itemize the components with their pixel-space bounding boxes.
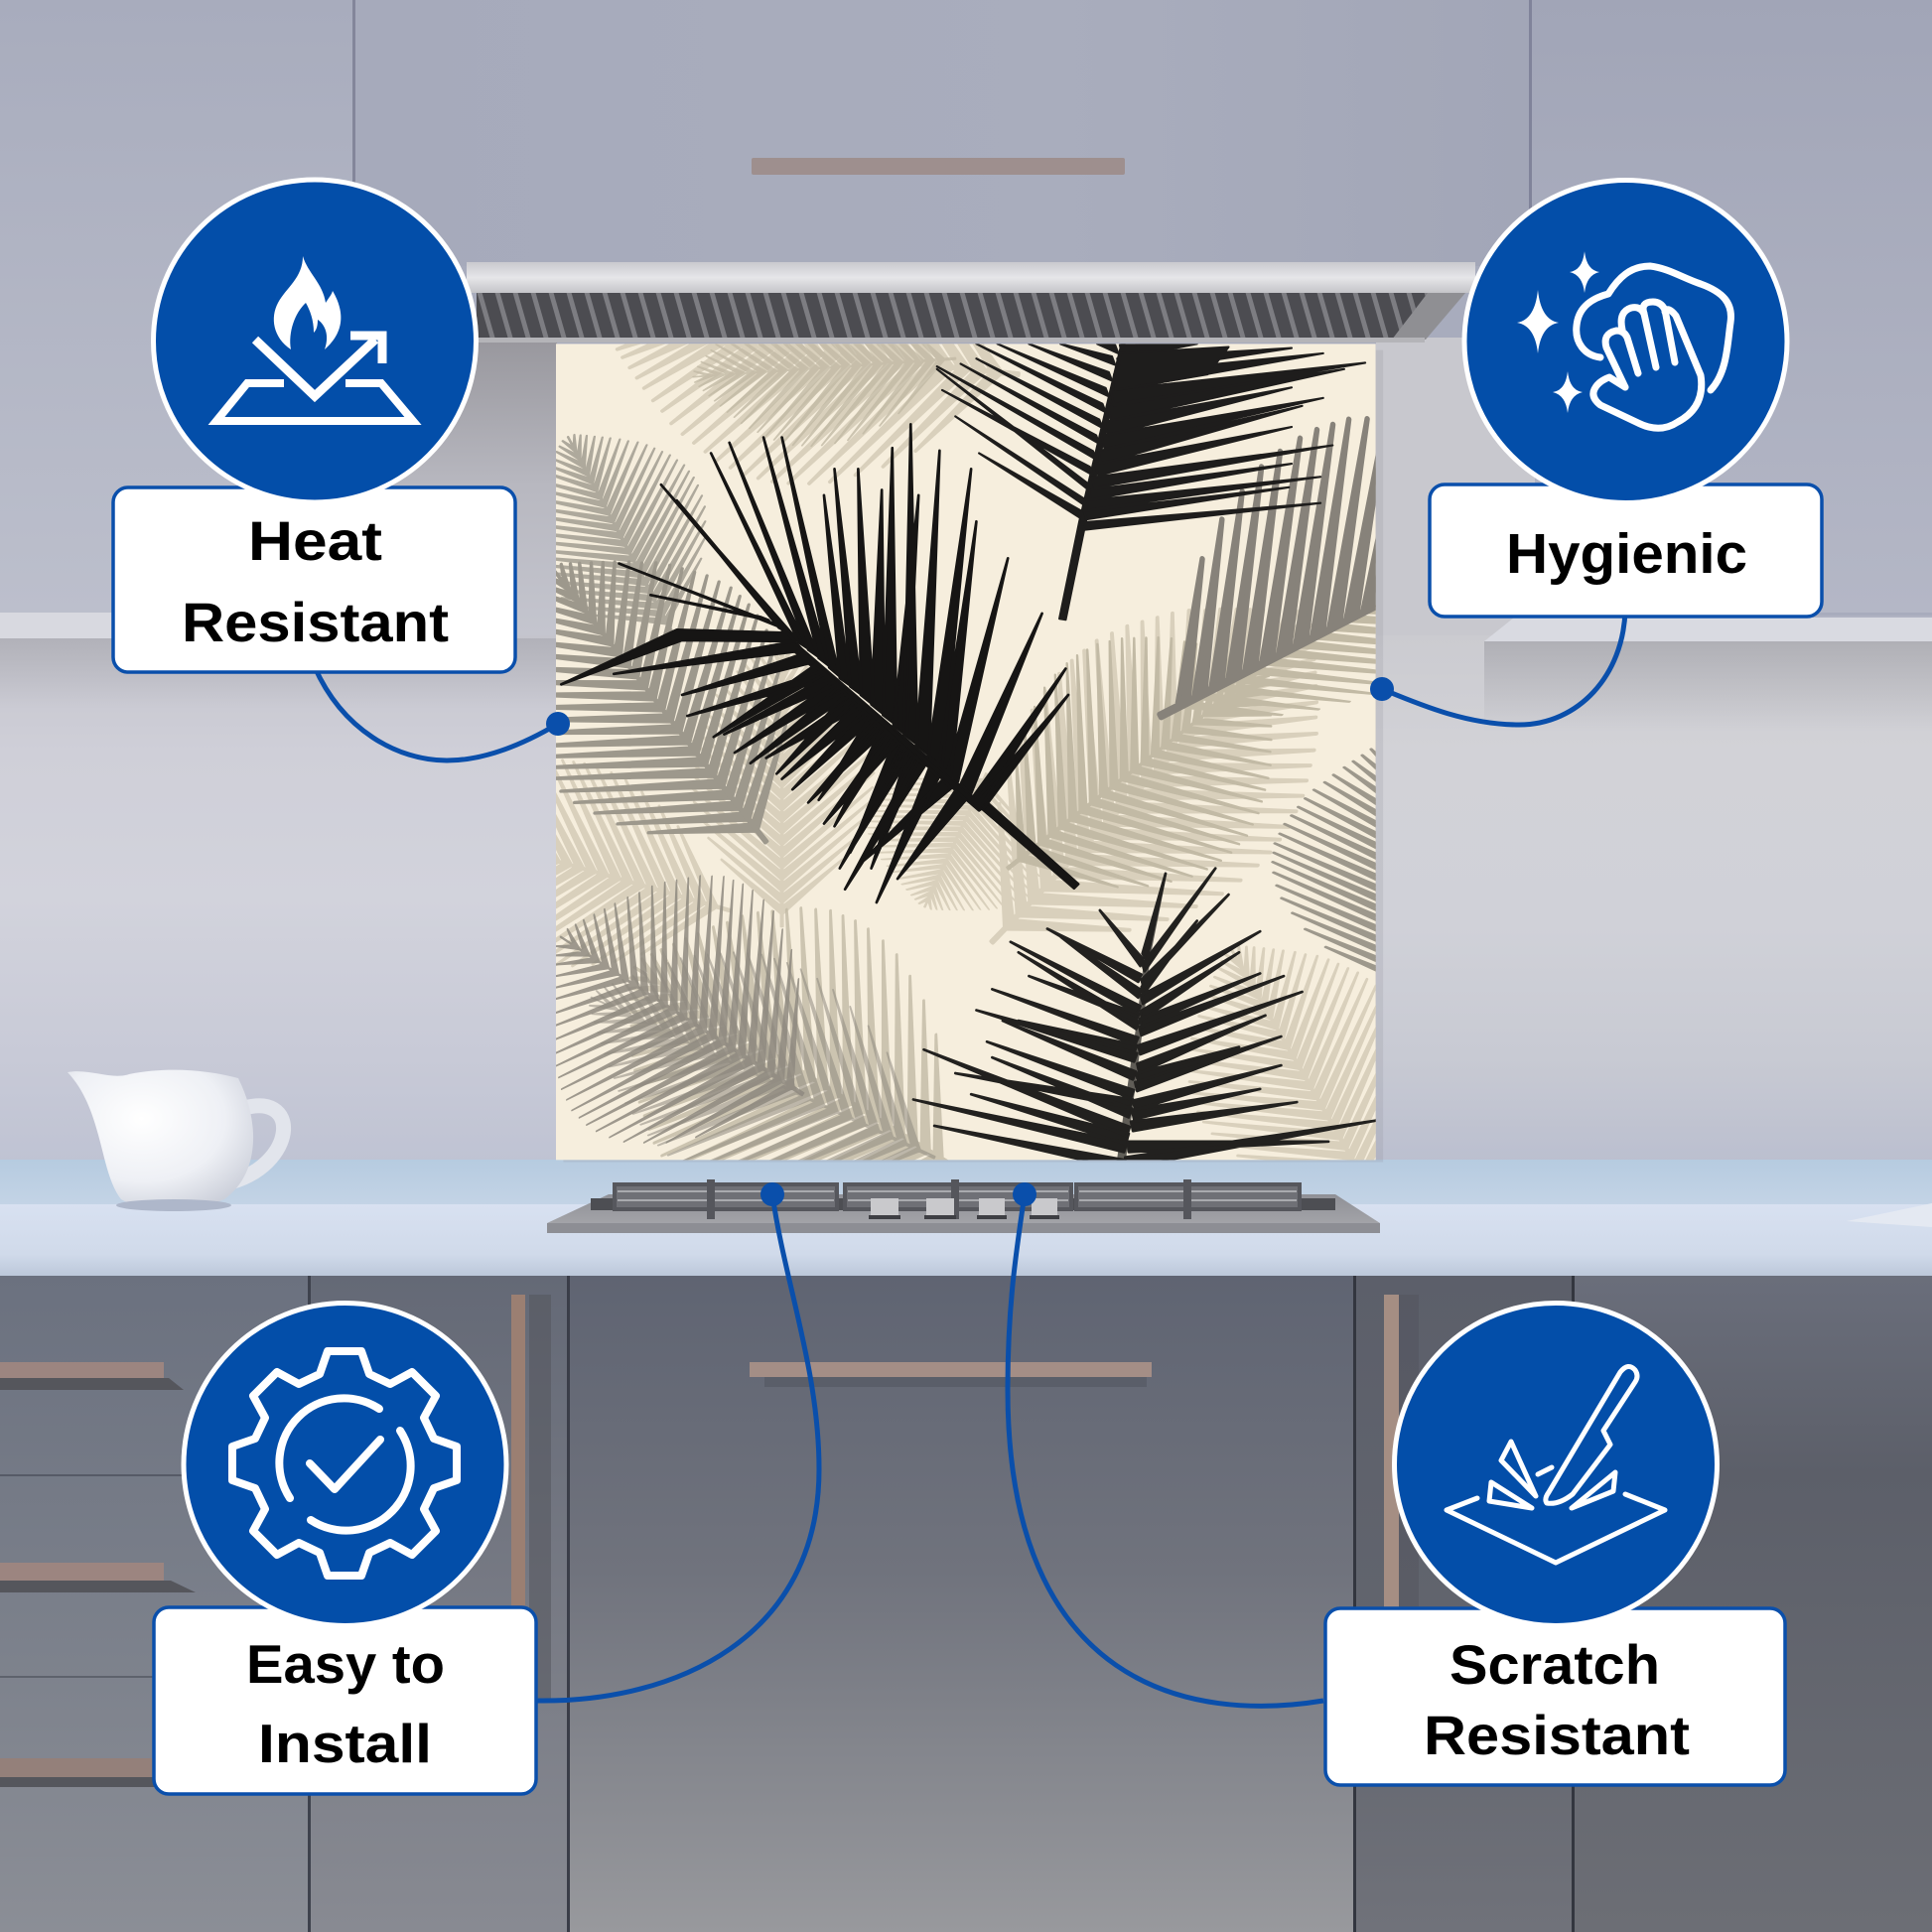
- badge circle: [1464, 181, 1787, 502]
- connector: heat resistant: [315, 667, 558, 760]
- badge circle: [153, 180, 477, 502]
- connector: hygienic: [1382, 611, 1625, 725]
- badge circle: [1394, 1303, 1718, 1626]
- callout: Easy to Install: [154, 1303, 536, 1794]
- black frond: centre: [561, 424, 1078, 902]
- badge circle: [184, 1303, 506, 1626]
- icon: knife scratching surface: [1447, 1366, 1665, 1563]
- heading line two: Resistant: [1424, 1704, 1690, 1766]
- heading: Easy to: [246, 1633, 445, 1695]
- tan fronds: [552, 282, 1619, 1301]
- lower cabinets: [0, 1276, 1932, 1932]
- grey fronds: [1157, 416, 1376, 721]
- pale background fronds: [398, 200, 1471, 1255]
- top cabinet handle: [752, 158, 1125, 175]
- icon: flame on surface: [216, 256, 413, 421]
- cabinet handles: [0, 1295, 1419, 1787]
- heading line two: Install: [258, 1713, 432, 1774]
- upper cabinets: [0, 0, 1932, 616]
- black frond: bottom right: [913, 869, 1376, 1169]
- callout: Hygienic: [1430, 181, 1822, 617]
- heading: Heat: [248, 509, 382, 572]
- heading line two: Resistant: [182, 591, 449, 653]
- wall and tiles: [0, 338, 1932, 1162]
- connector: scratch resistant: [1008, 1194, 1323, 1706]
- panel: palm leaf splashback: [556, 344, 1383, 1162]
- connector: easy to install: [537, 1194, 819, 1701]
- label box: [113, 487, 515, 672]
- range hood: [467, 262, 1475, 343]
- callout: Heat Resistant: [113, 180, 515, 672]
- label box: [1325, 1608, 1785, 1785]
- label box: [1430, 484, 1822, 617]
- label box: [154, 1607, 536, 1794]
- black frond: top right: [937, 344, 1365, 620]
- pitcher: [68, 1070, 284, 1211]
- connector dots: [546, 677, 1394, 1206]
- cooktop: [547, 1179, 1380, 1233]
- callout: Scratch Resistant: [1325, 1303, 1785, 1785]
- icon: gear with check: [232, 1351, 457, 1576]
- heading: Scratch: [1449, 1633, 1660, 1696]
- countertop: [0, 1160, 1932, 1276]
- icon: hand wiping with sparkles: [1517, 251, 1730, 428]
- heading: Hygienic: [1506, 522, 1747, 586]
